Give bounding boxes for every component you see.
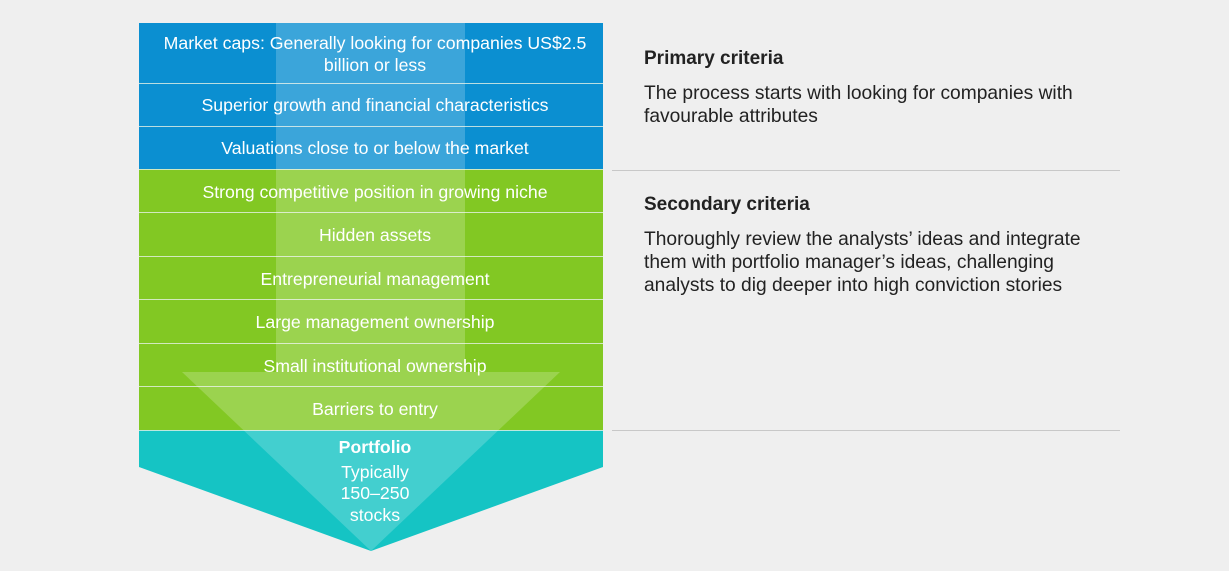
arrow overlay: [182, 23, 560, 551]
row labels: Large management ownership: [256, 312, 495, 332]
row labels: Small institutional ownership: [263, 356, 487, 376]
row labels: Strong competitive position in growing niche: [202, 182, 548, 202]
primary criteria text: The process starts with looking for companies with: [644, 83, 1073, 104]
row labels: [164, 33, 587, 525]
primary criteria text: favourable attributes: [644, 106, 818, 127]
primary criteria heading: Primary criteria: [644, 48, 783, 69]
green rows: [139, 169, 603, 430]
secondary criteria text: them with portfolio manager’s ideas, challenging: [644, 252, 1054, 273]
row labels: Typically: [341, 462, 409, 482]
secondary criteria text: analysts to dig deeper into high conviction stories: [644, 275, 1062, 296]
row labels: Hidden assets: [319, 225, 431, 245]
secondary criteria text: Thoroughly review the analysts’ ideas and integrate: [644, 229, 1081, 250]
row labels: 150–250: [341, 483, 410, 503]
blue rows: [139, 23, 603, 169]
portfolio chevron: [139, 430, 603, 551]
secondary criteria text: [644, 229, 1081, 296]
primary criteria text: [644, 83, 1073, 127]
row labels: Valuations close to or below the market: [221, 138, 529, 158]
row labels: Market caps: Generally looking for companies US$2.5: [164, 33, 587, 53]
secondary criteria heading: Secondary criteria: [644, 194, 810, 215]
row labels: Barriers to entry: [312, 399, 438, 419]
row labels: stocks: [350, 505, 400, 525]
row labels: Portfolio: [339, 437, 412, 457]
row labels: billion or less: [324, 55, 426, 75]
row labels: Superior growth and financial characteristics: [201, 95, 549, 115]
row labels: Entrepreneurial management: [260, 269, 490, 289]
